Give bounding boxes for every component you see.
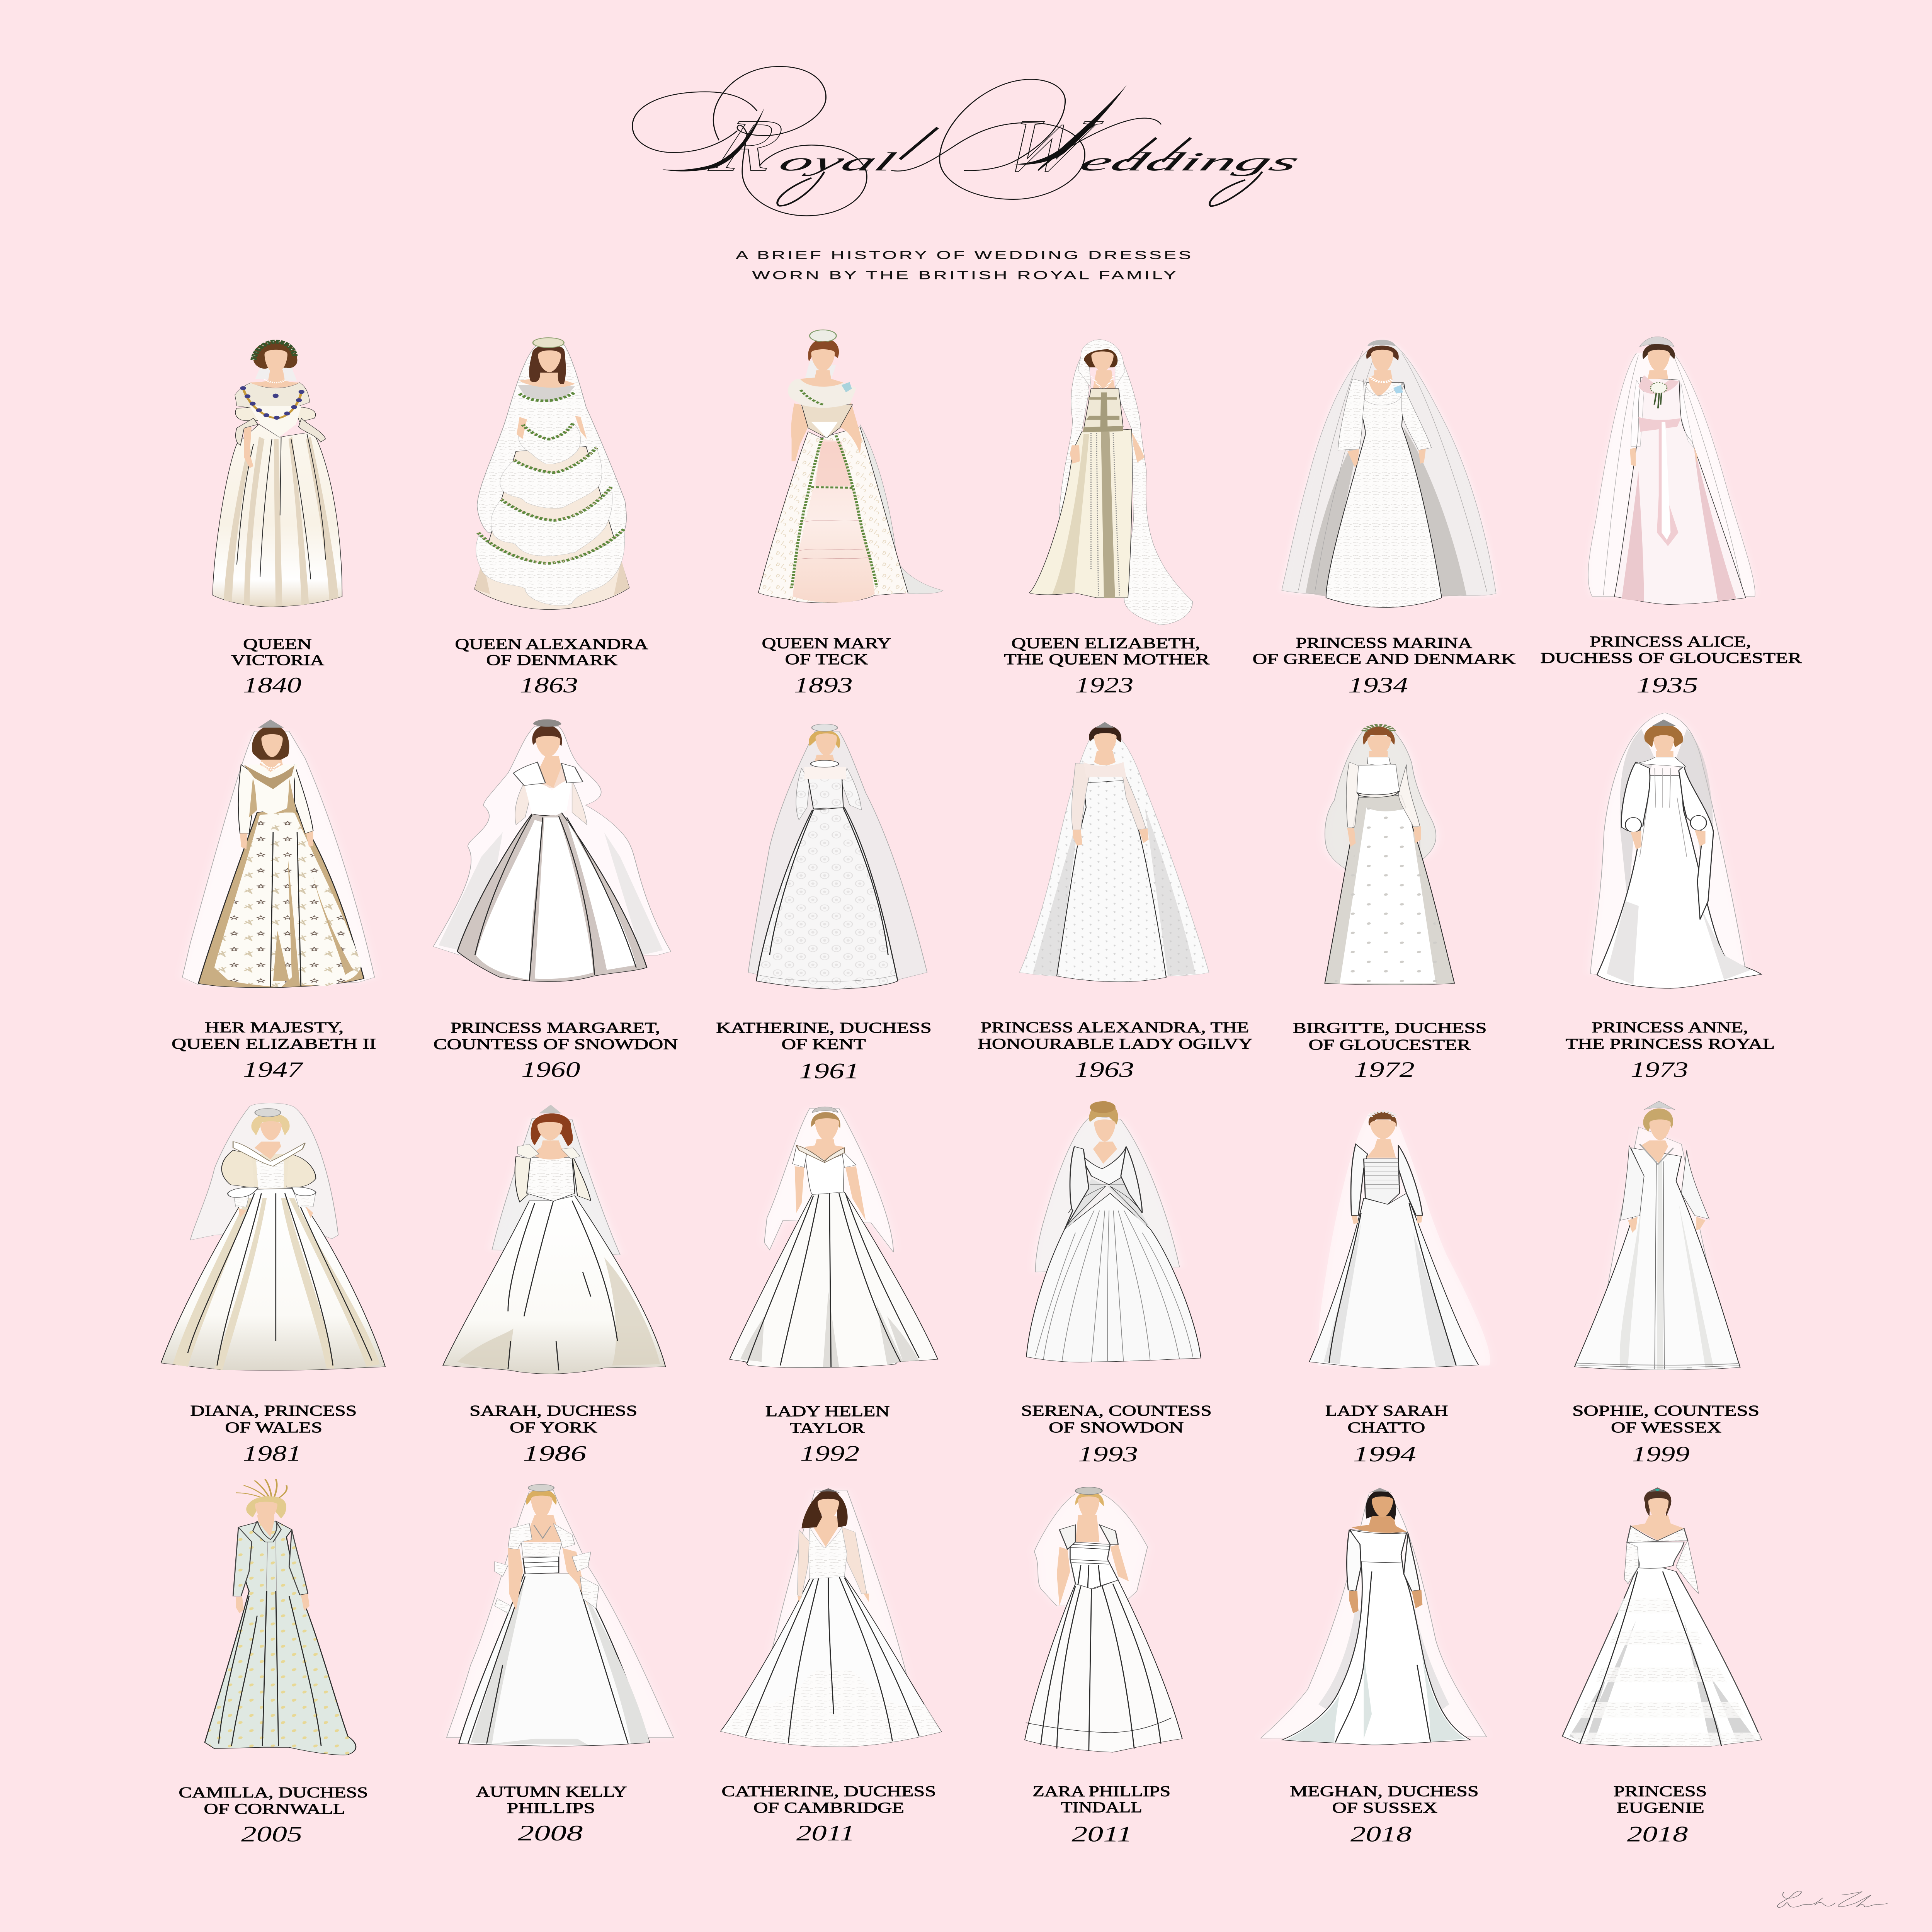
name: Princess Alexandra xyxy=(978,1019,1253,1052)
name: Camilla: OF CORNWALL xyxy=(204,1801,345,1817)
name: Princess Anne xyxy=(1566,1019,1775,1052)
panel: Princess Marina 1934 xyxy=(1253,340,1515,697)
dress: Queen Elizabeth the Queen Mother xyxy=(1029,340,1193,625)
year: 1999: 1999 xyxy=(1632,1442,1689,1466)
name: Princess Margaret xyxy=(434,1019,678,1053)
signature xyxy=(1777,1891,1888,1907)
name: Queen Victoria xyxy=(231,636,324,668)
name: Sarah xyxy=(469,1402,637,1435)
panel: Princess Alice 1935 xyxy=(1541,337,1802,697)
year: 1840: 1840 xyxy=(243,673,301,697)
name: Princess Margaret: COUNTESS OF SNOWDON xyxy=(434,1036,678,1053)
dress: Camilla xyxy=(205,1479,356,1755)
name: Queen Mary: OF TECK xyxy=(785,651,868,667)
name: Meghan: MEGHAN, DUCHESS xyxy=(1290,1783,1479,1799)
name: Princess Alice: PRINCESS ALICE, xyxy=(1590,633,1751,650)
panel: Serena 1993 xyxy=(1021,1101,1212,1466)
name: Queen Mary: QUEEN MARY xyxy=(762,635,891,651)
name: Katherine: KATHERINE, DUCHESS xyxy=(716,1019,932,1036)
subtitle: A BRIEF HISTORY OF WEDDING DRESSES xyxy=(736,249,1193,262)
dress: Meghan xyxy=(1261,1488,1486,1745)
name: Sarah: OF YORK xyxy=(510,1419,597,1435)
name: Queen Elizabeth, the Queen Mother: QUEEN ELIZABETH, xyxy=(1012,635,1200,651)
name: Diana: DIANA, PRINCESS xyxy=(190,1402,357,1419)
name: Queen Elizabeth II xyxy=(172,1019,376,1052)
dress: Princess Anne xyxy=(1591,713,1762,988)
year: 1961: 1961 xyxy=(799,1059,859,1083)
panel: Meghan 2018 xyxy=(1261,1488,1486,1847)
dress: Sarah xyxy=(443,1105,665,1374)
panel: Lady Helen Taylor 1992 xyxy=(730,1107,938,1466)
name: Sophie xyxy=(1572,1402,1759,1435)
name: Lady Sarah Chatto: CHATTO xyxy=(1348,1419,1425,1435)
name: Diana: OF WALES xyxy=(225,1419,322,1435)
W flourishes xyxy=(891,79,1262,206)
name: Princess Eugenie xyxy=(1614,1783,1707,1816)
panel: Her Majesty, Queen Elizabeth II 1947 xyxy=(172,719,376,1082)
name: Princess Alexandra: HONOURABLE LADY OGILVY xyxy=(978,1035,1253,1052)
name: Lady Helen: LADY HELEN xyxy=(765,1403,889,1420)
name: Birgitte xyxy=(1293,1020,1487,1053)
dress: Princess Alexandra xyxy=(1019,722,1209,982)
dress: Queen Alexandra xyxy=(474,338,629,610)
title text: W xyxy=(988,104,1111,187)
panel: Sarah, Duchess of York 1986 xyxy=(443,1105,665,1466)
name: Princess Marina xyxy=(1253,634,1515,667)
name: Queen Alexandra: OF DENMARK xyxy=(486,651,617,668)
year: 2005: 2005 xyxy=(241,1822,303,1847)
name: Sophie: SOPHIE, COUNTESS xyxy=(1572,1402,1759,1419)
title text: R xyxy=(701,104,796,187)
subtitle xyxy=(736,249,1193,282)
name: Serena xyxy=(1021,1402,1212,1435)
panel: Queen Mary of Teck 1893 xyxy=(758,330,943,697)
panel: Zara 2011 xyxy=(1025,1487,1182,1847)
name: Lady Helen xyxy=(765,1403,889,1436)
name: Birgitte: BIRGITTE, DUCHESS xyxy=(1293,1020,1486,1036)
dress: Queen Mary xyxy=(758,330,943,603)
name: Princess Alice: DUCHESS OF GLOUCESTER xyxy=(1541,650,1802,666)
panel: Sophie 1999 xyxy=(1572,1101,1759,1466)
year: 1947: 1947 xyxy=(243,1058,303,1082)
dress: Princess Marina xyxy=(1282,340,1496,607)
panel: Birgitte, Duchess of Gloucester 1972 xyxy=(1293,725,1487,1082)
year: 1994: 1994 xyxy=(1353,1442,1416,1466)
subtitle: WORN BY THE BRITISH ROYAL FAMILY xyxy=(752,269,1179,282)
year: 1981: 1981 xyxy=(243,1442,301,1466)
name: Princess Eugenie: PRINCESS xyxy=(1614,1783,1707,1799)
panel: Princess Anne 1973 xyxy=(1566,713,1775,1082)
name: Zara xyxy=(1032,1783,1170,1816)
name: Diana xyxy=(190,1402,357,1435)
year: 2011: 2011 xyxy=(1071,1822,1133,1847)
name: Catherine xyxy=(722,1783,936,1816)
panel: Diana 1981 xyxy=(161,1103,385,1466)
dress: Katherine xyxy=(748,724,927,989)
name: Autumn Kelly Phillips: PHILLIPS xyxy=(507,1800,595,1816)
name: Queen Elizabeth, the Queen Mother: THE QUEEN MOTHER xyxy=(1004,651,1209,667)
title text: eddings xyxy=(1075,147,1305,176)
dress: Lady Helen xyxy=(730,1107,938,1368)
dress: Queen Elizabeth II xyxy=(182,719,374,988)
dress: Sophie xyxy=(1575,1101,1740,1370)
name: Birgitte: OF GLOUCESTER xyxy=(1309,1036,1471,1053)
dress: Serena xyxy=(1026,1101,1201,1362)
name: Catherine: OF CAMBRIDGE xyxy=(753,1799,904,1816)
year: 2018: 2018 xyxy=(1627,1822,1688,1847)
name: Queen Elizabeth, the Queen Mother xyxy=(1004,635,1209,667)
name: Princess Margaret: PRINCESS MARGARET, xyxy=(451,1019,660,1036)
name: Princess Marina: OF GREECE AND DENMARK xyxy=(1253,651,1515,667)
panel: Princess Alexandra 1963 xyxy=(978,722,1253,1082)
name: Sophie: OF WESSEX xyxy=(1611,1419,1721,1435)
name: Queen Mary xyxy=(762,635,891,667)
name: Sarah: SARAH, DUCHESS xyxy=(469,1402,637,1419)
name: Princess Eugenie: EUGENIE xyxy=(1616,1799,1704,1816)
name: Queen Alexandra xyxy=(455,636,648,668)
year: 2018: 2018 xyxy=(1350,1822,1412,1847)
year: 1993: 1993 xyxy=(1078,1442,1138,1466)
panel: Princess Margaret 1960 xyxy=(433,719,678,1082)
panel: Queen Alexandra of Denmark 1863 xyxy=(455,338,648,697)
panel: Catherine 2011 xyxy=(721,1488,942,1845)
name: Queen Elizabeth II: QUEEN ELIZABETH II xyxy=(172,1035,376,1052)
panel: Camilla 2005 xyxy=(179,1479,368,1847)
year: 1973: 1973 xyxy=(1631,1058,1688,1082)
name: Zara: TINDALL xyxy=(1061,1799,1142,1816)
name: Meghan xyxy=(1290,1783,1479,1816)
name: Serena: OF SNOWDON xyxy=(1049,1419,1184,1435)
year: 1963: 1963 xyxy=(1075,1058,1134,1082)
name: Catherine: CATHERINE, DUCHESS xyxy=(722,1783,936,1799)
name: Camilla xyxy=(179,1784,368,1817)
dress: Autumn Kelly xyxy=(447,1485,673,1746)
year: 1863: 1863 xyxy=(520,673,578,697)
year: 2011: 2011 xyxy=(796,1821,855,1845)
year: 1893: 1893 xyxy=(794,673,853,697)
name: Queen Elizabeth II: HER MAJESTY, xyxy=(205,1019,344,1036)
name: Katherine xyxy=(716,1019,932,1053)
year: 1986: 1986 xyxy=(523,1442,587,1466)
name: Zara: ZARA PHILLIPS xyxy=(1032,1783,1170,1799)
year: 2008: 2008 xyxy=(518,1821,583,1845)
name: Queen Victoria: VICTORIA xyxy=(231,651,324,668)
year: 1960: 1960 xyxy=(521,1058,580,1082)
panel: Princess Eugenie 2018 xyxy=(1562,1487,1762,1847)
name: Princess Alice xyxy=(1541,633,1802,666)
panel: Lady Sarah Chatto 1994 xyxy=(1309,1111,1490,1466)
dress: Princess Eugenie xyxy=(1562,1487,1762,1747)
year: 1972: 1972 xyxy=(1354,1058,1415,1082)
panel: Queen Elizabeth, the Queen Mother 1923 xyxy=(1004,340,1209,697)
name: Lady Sarah Chatto: LADY SARAH xyxy=(1325,1402,1448,1419)
name: Lady Helen: TAYLOR xyxy=(790,1420,865,1436)
dress: Queen Victoria xyxy=(213,341,342,607)
dress: Princess Margaret xyxy=(433,719,671,981)
name: Camilla: CAMILLA, DUCHESS xyxy=(179,1784,368,1801)
name: Lady Sarah Chatto xyxy=(1325,1402,1448,1435)
dress: Zara xyxy=(1025,1487,1182,1752)
R flourishes xyxy=(633,66,867,216)
year: 1992: 1992 xyxy=(800,1442,859,1466)
year: 1935: 1935 xyxy=(1636,673,1698,697)
name: Queen Victoria: QUEEN xyxy=(243,636,312,652)
year: 1934: 1934 xyxy=(1348,673,1408,697)
dress: Birgitte xyxy=(1325,725,1454,985)
title text xyxy=(701,104,1305,187)
name: Princess Alexandra: PRINCESS ALEXANDRA, THE xyxy=(981,1019,1249,1036)
name: Princess Anne: THE PRINCESS ROYAL xyxy=(1566,1035,1775,1052)
dress: Diana xyxy=(161,1103,385,1370)
name: Autumn Kelly Phillips xyxy=(476,1783,627,1816)
name: Serena: SERENA, COUNTESS xyxy=(1021,1402,1212,1419)
title text: oyal xyxy=(774,148,901,176)
name: Princess Marina: PRINCESS MARINA xyxy=(1296,634,1472,651)
panel: Katherine, Duchess of Kent 1961 xyxy=(716,724,932,1083)
dress: Catherine xyxy=(721,1488,942,1747)
dress: Princess Alice xyxy=(1588,337,1755,604)
name: Meghan: OF SUSSEX xyxy=(1332,1799,1437,1816)
year: 1923: 1923 xyxy=(1075,673,1133,697)
name: Princess Anne: PRINCESS ANNE, xyxy=(1592,1019,1748,1036)
dress: Lady Sarah Chatto xyxy=(1309,1111,1490,1368)
name: Queen Alexandra: QUEEN ALEXANDRA xyxy=(455,636,648,652)
panel: Autumn Kelly Phillips 2008 xyxy=(447,1485,673,1845)
panel: Queen Victoria 1840 xyxy=(213,341,342,697)
title xyxy=(633,66,1305,216)
name: Katherine: OF KENT xyxy=(781,1036,866,1053)
name: Autumn Kelly Phillips: AUTUMN KELLY xyxy=(476,1783,627,1800)
